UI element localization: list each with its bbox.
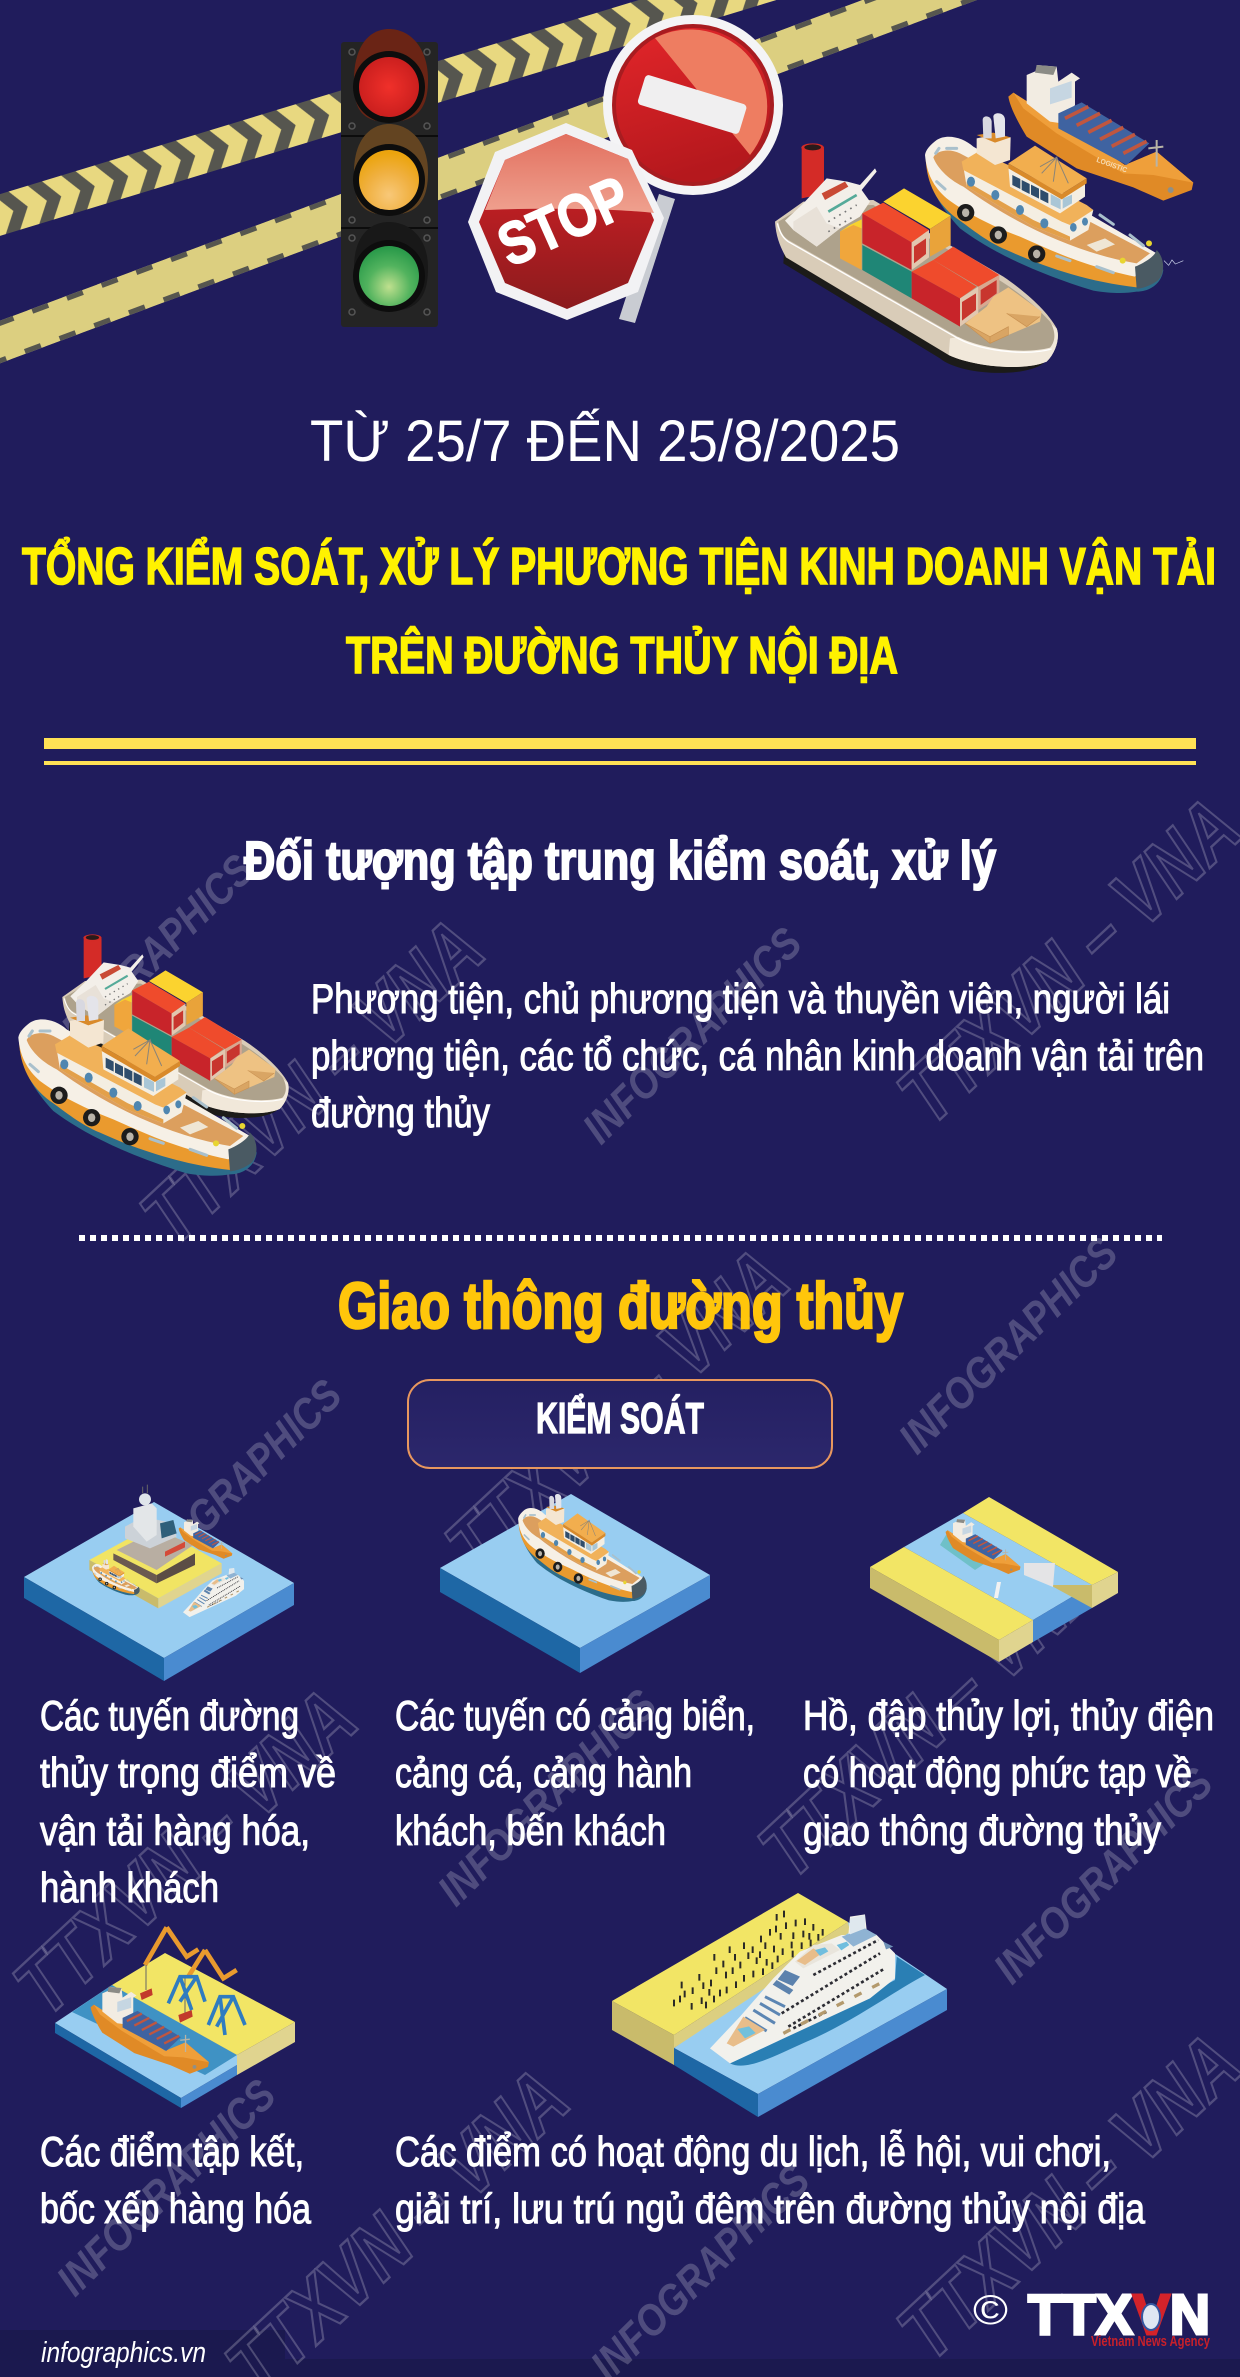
- icon: sea route diorama: [440, 1494, 710, 1673]
- watermarks: INFOGRAPHICS: [26, 845, 263, 1080]
- small container ship: [179, 1519, 232, 1559]
- title: TRÊN ĐƯỜNG THỦY NỘI ĐỊA: [346, 626, 898, 685]
- text: lakes and dams: giao thông đường thủy: [803, 1807, 1161, 1854]
- small cruise ship: [183, 1568, 244, 1617]
- icon: no-entry sign: [603, 15, 783, 195]
- tugboat: [925, 113, 1163, 293]
- website credit: infographics.vn: [41, 2337, 206, 2369]
- text: key routes: [40, 1692, 336, 1911]
- paragraph: target groups: đường thủy: [311, 1089, 490, 1136]
- title: [22, 537, 1216, 685]
- footer band: [0, 2330, 1240, 2377]
- icon: stop sign: [468, 123, 664, 320]
- icon: signal pole: [619, 194, 675, 323]
- heading: waterway traffic: Giao thông đường thủy: [338, 1269, 903, 1342]
- text: routes with ports: Các tuyến có cảng biển,: [395, 1692, 755, 1739]
- small tug: [92, 1559, 140, 1595]
- watermarks: INFOGRAPHICS: [429, 1680, 666, 1915]
- text: key routes: thủy trọng điểm về: [40, 1749, 336, 1796]
- text: routes with ports: khách, bến khách: [395, 1807, 666, 1854]
- illustration: cargo ship, tug and container ship: [775, 65, 1193, 373]
- button: control: [408, 1380, 832, 1468]
- container ship: [91, 1987, 209, 2074]
- double rule under title: [44, 738, 1196, 765]
- watermarks: TTXVN – VNA: [0, 1672, 374, 2032]
- cargo ship: [775, 143, 1058, 373]
- text: tourism points: Các điểm có hoạt động du lịch, lễ hội, vui chơi,: [395, 2128, 1111, 2175]
- hazard tape: lower band: [0, 0, 1000, 375]
- cruise ship: [710, 1914, 895, 2063]
- hazard tape: upper chevron band: [0, 0, 829, 246]
- icon: cruise terminal diorama: [612, 1893, 947, 2117]
- icon: island port diorama: [24, 1485, 294, 1681]
- text: tourism points: [395, 2128, 1146, 2232]
- watermarks: INFOGRAPHICS: [890, 1228, 1127, 1463]
- cranes: [145, 1927, 237, 1978]
- text: key routes: hành khách: [40, 1864, 219, 1911]
- container ship: [946, 1519, 1020, 1574]
- logo: TTXVN: ©: [973, 2286, 1008, 2333]
- text: lakes and dams: [803, 1692, 1214, 1854]
- container ship: [1008, 65, 1193, 201]
- date line: TỪ 25/7 ĐẾN 25/8/2025: [310, 409, 900, 474]
- heading: target groups: Đối tượng tập trung kiểm soát, xử lý: [244, 831, 996, 891]
- tugboat: [518, 1494, 647, 1602]
- cargo ship: [62, 934, 289, 1118]
- watermarks: INFOGRAPHICS: [48, 2070, 285, 2305]
- illustration: ships beside target groups: [18, 934, 289, 1176]
- dotted divider: [79, 1235, 1162, 1241]
- watermarks: TTXVN – VNA: [742, 1535, 1119, 1895]
- paragraph: target groups: [311, 975, 1204, 1136]
- tugboat: [18, 996, 257, 1176]
- icon: traffic light: [341, 29, 438, 327]
- watermarks: INFOGRAPHICS: [114, 1370, 351, 1605]
- text: key routes: Các tuyến đường: [40, 1692, 299, 1739]
- text: freight points: bốc xếp hàng hóa: [40, 2185, 312, 2232]
- label on container ship hull: LOGISTIC: [1095, 155, 1129, 175]
- crowd of people: [674, 1911, 823, 2010]
- icon: stop sign: STOP: [488, 163, 639, 280]
- icon: dam and lake diorama: [870, 1497, 1118, 1662]
- watermarks: TTXVN – VNA: [429, 1232, 806, 1592]
- watermarks: INFOGRAPHICS: [574, 918, 811, 1153]
- button: control: KIỂM SOÁT: [536, 1392, 704, 1443]
- text: key routes: vận tải hàng hóa,: [40, 1807, 310, 1854]
- logo: TTXVN: TTXVN: [1028, 2283, 1210, 2347]
- watermarks: TTXVN – VNA: [124, 902, 501, 1262]
- text: freight points: [40, 2128, 312, 2232]
- text: routes with ports: [395, 1692, 755, 1854]
- icon: freight terminal diorama: [55, 1927, 295, 2108]
- text: routes with ports: cảng cá, cảng hành: [395, 1749, 692, 1796]
- watermarks: [0, 781, 1240, 2377]
- text: freight points: Các điểm tập kết,: [40, 2128, 304, 2175]
